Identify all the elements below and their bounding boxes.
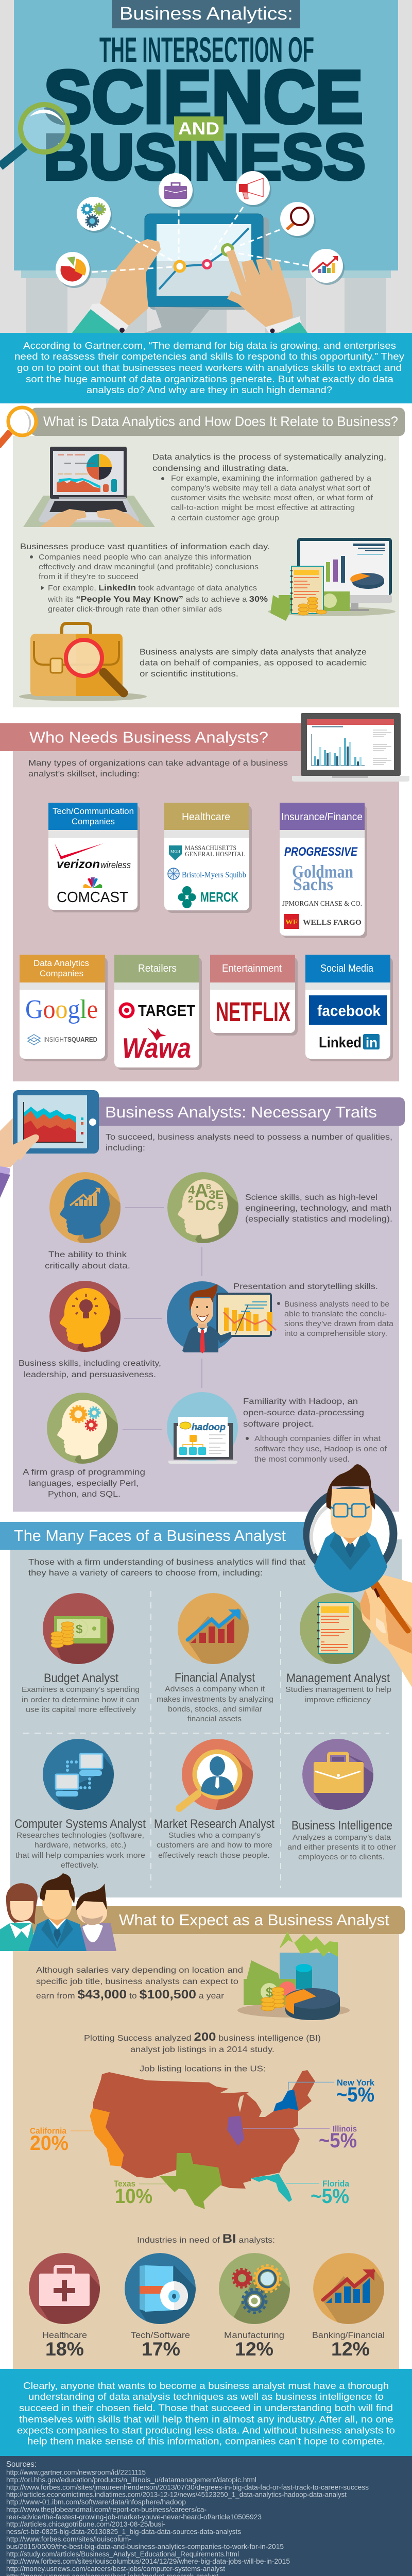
industry: manufacturing [219, 2253, 290, 2355]
trait: presentation skills: Presentation and storytelling skills. [233, 1282, 378, 1291]
section heading [31, 1906, 405, 1934]
callout: texas: 10% [115, 2185, 152, 2208]
industry: manufacturing: Manufacturing [224, 2330, 284, 2340]
illustration: laptop with hands [23, 447, 155, 527]
logo: massachusetts general hospital: GENERAL HOSPITAL [185, 851, 245, 858]
closing band: help them make sense of this information, companies can’t hope to compete. [27, 2436, 385, 2446]
card: retailers: Retailers [138, 963, 177, 974]
career: market research analyst: customers are and how to more [157, 1841, 272, 1850]
intro band [0, 333, 412, 403]
icon: head with letters and numbers: 2 [188, 1194, 193, 1205]
text: careers intro [28, 1558, 306, 1578]
career: business intelligence: Analyzes a company’s data [293, 1834, 391, 1842]
industry: banking/financial [313, 2253, 384, 2355]
career: financial analyst: makes investments by analyzing [157, 1696, 273, 1704]
icon: orange magnifier [0, 408, 36, 446]
section heading: Business Analysts: Necessary Traits [105, 1103, 377, 1121]
logo: goldman sachs: Sachs [293, 874, 333, 894]
career: business intelligence: Business Intelligence [291, 1819, 392, 1833]
intro band: analysts do? And why are they in such high demand? [87, 385, 332, 395]
sources list: ness/ct-biz-0825-big-data-20130825_1_big-data-data-sources-data-analysts [6, 2528, 241, 2536]
card: healthcare [164, 803, 252, 913]
sources list: http://articles.economictimes.indiatimes.com/2013-12-12/news/45123250_1_data-analytics-hadoop-data-analyst [6, 2491, 347, 2499]
illustration: money, chart and pie: $ [266, 1985, 273, 2000]
trait: presentation skills: Business analysts need to be [284, 1300, 389, 1309]
logo: wells fargo [284, 914, 362, 929]
left hand [72, 239, 161, 333]
icon: laptop with hadoop: hadoop [192, 1422, 226, 1432]
title banner [112, 0, 300, 28]
career: business intelligence [287, 1739, 396, 1861]
icon: head with letters and numbers: 5 [218, 1201, 224, 1212]
trait: business skills [19, 1281, 161, 1379]
logo: goldman sachs: Goldman [292, 861, 353, 882]
career: computer systems analyst [14, 1739, 146, 1870]
card: insurance/finance [280, 803, 367, 938]
logo: linkedin: in [366, 1035, 377, 1050]
text: business analysts definition [140, 648, 367, 679]
title banner: Business Analytics: [119, 4, 293, 24]
sources list: http://ori.hhs.gov/education/products/n_illinois_u/datamanagement/datopic.html [6, 2476, 256, 2484]
career: financial analyst: bonds, stocks, and similar [168, 1705, 262, 1714]
text: business analysts definition: or scientific institutions. [140, 670, 238, 679]
career: market research analyst: Studies who a company’s [168, 1832, 261, 1840]
icon: head with lightbulb [49, 1281, 121, 1352]
trait: science skills: engineering, technology, and math [245, 1204, 391, 1213]
logo: verizon wireless: verizon [57, 857, 100, 871]
icon: notebook [300, 1593, 371, 1664]
logo: wawa: Wawa [122, 1032, 191, 1064]
career: market research analyst: effectively reach those people. [158, 1852, 270, 1860]
card: entertainment: Entertainment [222, 963, 282, 974]
sources list: Sources: [6, 2460, 37, 2469]
icon: head with gears [47, 1393, 118, 1464]
callout: florida [286, 2179, 349, 2208]
career: management analyst: improve efficiency [305, 1696, 371, 1704]
icon: pie chart [56, 252, 91, 288]
trait: hadoop: Although companies differ in what [254, 1435, 381, 1443]
trait: critical thinking: The ability to think [48, 1250, 127, 1259]
logo: goldman sachs [292, 861, 353, 894]
chart nodes [175, 245, 233, 271]
career: financial analyst: Advises a company when it [165, 1685, 265, 1693]
illustration: briefcase with magnifier [19, 623, 147, 701]
icon: growth arrow [178, 1593, 249, 1664]
text: plotting success study: Job listing locations in the US: [140, 2065, 266, 2073]
callout: california: California [30, 2126, 66, 2136]
card: insurance/finance: Insurance/Finance [281, 811, 363, 823]
card: healthcare: Healthcare [182, 811, 230, 823]
text: traits intro: To succeed, business analysts need to possess a number of qualities, [106, 1133, 392, 1142]
trait: programming languages: A firm grasp of programming [23, 1468, 145, 1477]
career: budget analyst: Examines a company’s spending [22, 1686, 140, 1694]
text: businesses produce information: For example, LinkedIn took advantage of data analytics [48, 584, 257, 592]
industry: tech/software: Tech/Software [131, 2330, 190, 2340]
sources list: http://www-01.ibm.com/software/data/infosphere/hadoop [6, 2498, 186, 2506]
career: computer systems analyst: that will help companies work more [15, 1852, 145, 1860]
card: data analytics companies: Companies [40, 969, 83, 978]
career: business intelligence: and either presents it to other [287, 1843, 396, 1852]
text: salary range: specific job title, business analysts can expect to [36, 1977, 238, 1986]
icon: software box and disc [125, 2253, 196, 2324]
callout: texas [114, 2179, 167, 2208]
section heading: What to Expect as a Business Analyst [119, 1911, 389, 1929]
trait: presentation skills: into a comprehensible story. [284, 1330, 387, 1338]
career: budget analyst: use its capital more effectively [26, 1706, 136, 1714]
trait: business skills: Business skills, including creativity, [19, 1359, 161, 1368]
section heading [0, 1522, 314, 1550]
text: businesses produce information: from it if they’re to succeed [39, 573, 139, 581]
footer [0, 2456, 412, 2576]
career: budget analyst: Budget Analyst [44, 1671, 118, 1685]
trait: hadoop: open-source data-processing [243, 1409, 364, 1417]
card: tech/communication companies [48, 803, 140, 912]
career: financial analyst: Financial Analyst [175, 1671, 255, 1685]
section heading [0, 723, 314, 751]
icon: gears [77, 197, 112, 233]
text: plotting success study: Plotting Success analyzed 200 business intelligence (BI) [84, 2030, 321, 2043]
logo: insightsquared: INSIGHTSQUARED [43, 1036, 97, 1043]
text: salary range [36, 1966, 243, 2002]
card: social media [305, 955, 393, 1061]
text: definition of data analytics: customer visits the website most often, or what form of [171, 494, 373, 502]
text: definition of data analytics: company’s website may tell a data analyst what sort of [171, 484, 370, 493]
card: data analytics companies: Data Analytics [33, 958, 89, 968]
icon: head with letters and numbers: DC [195, 1197, 216, 1213]
text: industries heading: Industries in need of BI analysts: [137, 2232, 275, 2246]
logo: verizon wireless [55, 843, 131, 871]
sources list: http://www.forbes.com/sites/jmaureenhenderson/2013/07/30/degrees-in-big-data-fad-or-fast-track-to-career-success [6, 2483, 369, 2491]
connector lines [123, 1208, 202, 1430]
logo: linkedin: Linked [319, 1035, 362, 1051]
career: market research analyst: Market Research Analyst [154, 1817, 274, 1831]
text: businesses produce information: greater click-through rate than other similar ads [48, 605, 222, 614]
career: financial analyst [157, 1593, 273, 1723]
trait: programming languages [23, 1393, 145, 1499]
trait: programming languages: languages, especially Perl, [29, 1479, 139, 1488]
text: definition of data analytics: a certain customer age group [171, 514, 279, 522]
panel: who needs business analysts [0, 713, 409, 1081]
callout: texas: Texas [114, 2179, 135, 2189]
card: retailers [114, 955, 202, 1070]
intro band: According to Gartner.com, “The demand for big data is growing, and enterprises [23, 341, 396, 351]
sources list: http://www.gartner.com/newsroom/id/2211115 [6, 2469, 146, 2476]
intro band: sort the huge amount of data organizations generate. But what exactly do data [26, 374, 394, 384]
career: budget analyst: in order to determine how it can [22, 1696, 140, 1704]
callout: new york: ~5% [336, 2083, 374, 2106]
sources list: reer-advice/the-fastest-growing-job-market-youve-never-heard-of/article10505923 [6, 2513, 262, 2521]
map region: california [90, 2108, 124, 2166]
text: organizations intro: analyst’s skillset, including: [28, 770, 140, 778]
industry: healthcare [29, 2253, 100, 2355]
section heading: The Many Faces of a Business Analyst [14, 1527, 286, 1545]
callout: new york: New York [337, 2078, 375, 2088]
illustration: laptop with bar chart [292, 713, 409, 782]
text: businesses produce information: effectively and draw meaningful (and profitable) conclusions [39, 563, 259, 571]
icon: magnifier on person [176, 1739, 253, 1812]
logo: comcast [57, 877, 128, 906]
industry: healthcare: 18% [45, 2338, 84, 2360]
icon: head with letters and numbers: A [195, 1180, 208, 1201]
illustration: hand holding magnifier over analyst [307, 1464, 412, 1687]
career: management analyst: Management Analyst [286, 1671, 390, 1685]
main title: BUSINESS [43, 122, 366, 193]
callout: illinois: Illinois [333, 2124, 357, 2134]
callout: florida: Florida [322, 2179, 349, 2189]
map region: florida [251, 2174, 292, 2202]
logo: verizon wireless: wireless [100, 860, 131, 870]
intro band: need to reassess their competencies and skills to respond to this opportunity.” They [14, 351, 404, 362]
logo: target [121, 1002, 195, 1020]
logo: facebook: facebook [317, 1003, 381, 1020]
industry: healthcare: Healthcare [42, 2330, 87, 2340]
trait: hadoop: Familiarity with Hadoop, an [243, 1397, 358, 1406]
industry: tech/software [125, 2253, 196, 2355]
text: business analysts definition: Business analysts are simply data analysts that analyze [140, 648, 367, 656]
career: budget analyst [22, 1593, 140, 1714]
right hand [226, 249, 307, 333]
text: businesses produce information: with its “People You May Know” ads to achieve a 30% [47, 595, 268, 604]
icon: gears [219, 2253, 290, 2324]
career: computer systems analyst: Researches technologies (software, [16, 1832, 144, 1840]
logo: bristol-myers squibb [168, 868, 246, 879]
text: careers intro: Those with a firm understanding of business analytics will find that [28, 1558, 306, 1567]
career: market research analyst [154, 1739, 274, 1860]
icon: growth arrow [313, 2253, 384, 2324]
closing band: Clearly, anyone that wants to become a business analyst must have a thorough [23, 2381, 389, 2391]
callout: new york [288, 2078, 375, 2106]
career: computer systems analyst: hardware, networks, etc.) [35, 1841, 126, 1850]
closing band: succeed in their chosen field. Those that succeed in understanding both will find [19, 2403, 393, 2413]
closing band: expects companies to start producing less data. And without business analysts to [17, 2426, 395, 2436]
map region: texas [160, 2153, 222, 2209]
trait: hadoop: the most commonly used. [254, 1455, 350, 1464]
trait: critical thinking [45, 1172, 134, 1270]
icon: head with letters and numbers: B [206, 1182, 211, 1191]
sources list: http://money.usnews.com/careers/best-jobs/computer-systems-analyst [6, 2565, 225, 2573]
trait: science skills [167, 1172, 391, 1243]
text: business analysts definition: data on behalf of companies, as opposed to academic [140, 658, 367, 668]
sources list: http://www.forbes.com/sites/louiscolum- [6, 2535, 131, 2543]
map: job listing locations [30, 2070, 375, 2209]
text: definition of data analytics: condensing and illustrating data. [152, 464, 289, 473]
logo: wells fargo: WELLS FARGO [303, 919, 362, 927]
callout: illinois [243, 2124, 357, 2152]
callout: florida: ~5% [311, 2185, 349, 2208]
logo: jpmorgan chase: JPMORGAN CHASE & CO. [282, 900, 362, 908]
logo: wells fargo: WF [285, 919, 298, 926]
text: careers intro: they have a variety of careers to choose from, including: [28, 1569, 263, 1578]
panel: necessary traits [0, 1090, 405, 1512]
dashed connectors [92, 207, 308, 272]
icon: megaphone [236, 171, 271, 207]
logo: target: TARGET [138, 1002, 195, 1020]
icon: growth chart [309, 249, 345, 285]
trait: hadoop: software project. [243, 1420, 314, 1429]
icon: money and coins: $ [76, 1622, 83, 1636]
trait: business skills: leadership, and persuasiveness. [24, 1370, 156, 1379]
tablet [144, 214, 269, 333]
text: organizations intro [28, 759, 288, 778]
card: data analytics companies [20, 955, 108, 1061]
industry: banking/financial: Banking/Financial [312, 2330, 385, 2340]
text: definition of data analytics: Data analytics is the process of systematically analyzing, [152, 453, 386, 462]
icon: first aid kit [29, 2253, 100, 2324]
sources list: http://study.com/articles/Business_Analyst_Educational_Requirements.html [6, 2550, 239, 2558]
closing band: understanding of data analysis techniques as well as business intelligence to [28, 2392, 384, 2402]
intro band: go on to point out that businesses need workers with analytics skills to extract and [17, 363, 402, 373]
career: computer systems analyst: Computer Systems Analyst [14, 1817, 146, 1831]
section heading: What is Data Analytics and How Does It Relate to Business? [43, 414, 398, 429]
main title: SCIENCE [44, 55, 363, 139]
career: computer systems analyst: effectively. [61, 1861, 99, 1870]
text: definition of data analytics [152, 453, 386, 522]
text: plotting success study: analyst job listings in a 2014 study. [130, 2045, 274, 2054]
logo: bristol-myers squibb: Bristol-Myers Squibb [182, 871, 246, 879]
text: definition of data analytics: For example, examining the information gathered by a [171, 474, 372, 483]
trait: hadoop [167, 1392, 387, 1464]
logo: massachusetts general hospital [169, 844, 245, 860]
logo: facebook [309, 995, 387, 1025]
trait: hadoop: software they use, Hadoop is one of [254, 1445, 387, 1453]
panel: what is data analytics [0, 408, 405, 707]
text: definition of data analytics: call-to-action might be most effective at attracting [171, 504, 355, 512]
logo: massachusetts general hospital: MGH [170, 850, 180, 854]
logo: progressive: PROGRESSIVE [284, 845, 358, 859]
trait: science skills: Science skills, such as high-level [245, 1193, 377, 1202]
trait: science skills: (especially statistics and modeling). [245, 1215, 392, 1224]
closing band: themselves with skills that will help them in almost any industry. After all, no one [19, 2414, 393, 2425]
career: business intelligence: employees or to clients. [298, 1853, 385, 1861]
trait: critical thinking: critically about data. [45, 1262, 130, 1270]
career: financial analyst: financial assets [187, 1715, 242, 1723]
sources list: http://www.theglobeandmail.com/report-on-business/careers/ca- [6, 2506, 207, 2513]
and badge: AND [178, 119, 219, 139]
panel: what to expect [0, 1873, 405, 2369]
logo: insightsquared [28, 1035, 97, 1045]
text: plotting success study [84, 2030, 321, 2073]
callout: california [30, 2126, 93, 2155]
section heading: Who Needs Business Analysts? [29, 728, 268, 746]
callout: california: 20% [30, 2132, 68, 2155]
sources list: http://www.forbes.com/sites/louiscolumbus/2014/12/29/where-big-data-jobs-will-be-in-2015 [6, 2557, 290, 2565]
icon: head with letters and numbers [167, 1172, 238, 1243]
career: management analyst [285, 1593, 391, 1704]
main title [43, 30, 366, 193]
sources list: bus/2015/05/09/the-best-big-data-and-business-analytics-companies-to-work-for-in-2015 [6, 2543, 284, 2550]
card: entertainment [210, 955, 298, 1036]
illustration: monitor with money [268, 538, 396, 621]
callout: illinois: ~5% [319, 2129, 357, 2152]
sources list [6, 2460, 369, 2576]
icon: briefcase [302, 1739, 373, 1810]
industry: banking/financial: 12% [331, 2338, 370, 2360]
section heading [88, 1097, 405, 1126]
map region: new york [273, 2090, 298, 2111]
illustration: three analysts [0, 1873, 116, 1951]
icon: briefcase [159, 173, 194, 209]
icon: red magnifier [280, 202, 316, 238]
icon: green magnifier [0, 105, 68, 166]
logo: google: Google [25, 995, 98, 1024]
panel: many faces of a business analyst [0, 1464, 412, 1897]
icon: head with letters and numbers: 4 [188, 1183, 195, 1197]
text: traits intro: including: [106, 1144, 145, 1153]
logo: merck [178, 886, 238, 908]
industry: tech/software: 17% [142, 2338, 180, 2360]
icon: laptop with hadoop [167, 1392, 238, 1464]
career: management analyst: Studies management to help [285, 1686, 391, 1694]
logo: merck: MERCK [200, 889, 238, 905]
logo: comcast: COMCAST [57, 889, 128, 906]
text: organizations intro: Many types of organizations can take advantage of a business [28, 759, 288, 768]
illustration: hand holding tablet [0, 1090, 99, 1198]
text: salary range: Although salaries vary depending on location and [36, 1966, 243, 1975]
card: tech/communication companies: Companies [72, 817, 115, 826]
icon: connected computers [43, 1739, 114, 1810]
closing band [0, 2369, 412, 2456]
text: businesses produce information: Businesses produce vast quantities of information each day. [20, 543, 270, 551]
text: traits intro [106, 1133, 392, 1153]
card: social media: Social Media [320, 963, 374, 974]
illustration: money, chart and pie [237, 1931, 350, 2020]
icon: money and coins [43, 1593, 114, 1664]
trait: programming languages: Python, and SQL. [48, 1490, 121, 1499]
icon: head with letters and numbers: 3E [209, 1188, 224, 1202]
map region: illinois [227, 2116, 244, 2146]
industry: manufacturing: 12% [235, 2338, 273, 2360]
sources list: http://articles.chicagotribune.com/2013-08-25/busi- [6, 2520, 165, 2528]
trait: presentation skills: able to translate the conclu- [284, 1310, 387, 1318]
trait: presentation skills [167, 1281, 394, 1353]
icon: head with growth chart [49, 1172, 121, 1243]
card: tech/communication companies: Tech/Communication [53, 806, 134, 816]
section heading [31, 408, 405, 436]
text: salary range: earn from $43,000 to $100,500 a year [36, 1988, 225, 2002]
panel: hero header [0, 0, 412, 333]
and badge [174, 116, 224, 141]
text: businesses produce information [20, 543, 270, 614]
text: businesses produce information: Companies need people who can analyze this information [39, 553, 251, 562]
logo: netflix: NETFLIX [216, 997, 290, 1027]
trait: presentation skills: sions they’ve drawn from data [284, 1320, 394, 1328]
icon: presenter with board [167, 1281, 276, 1353]
logo: massachusetts general hospital: MASSACHUSETTS [185, 844, 236, 852]
